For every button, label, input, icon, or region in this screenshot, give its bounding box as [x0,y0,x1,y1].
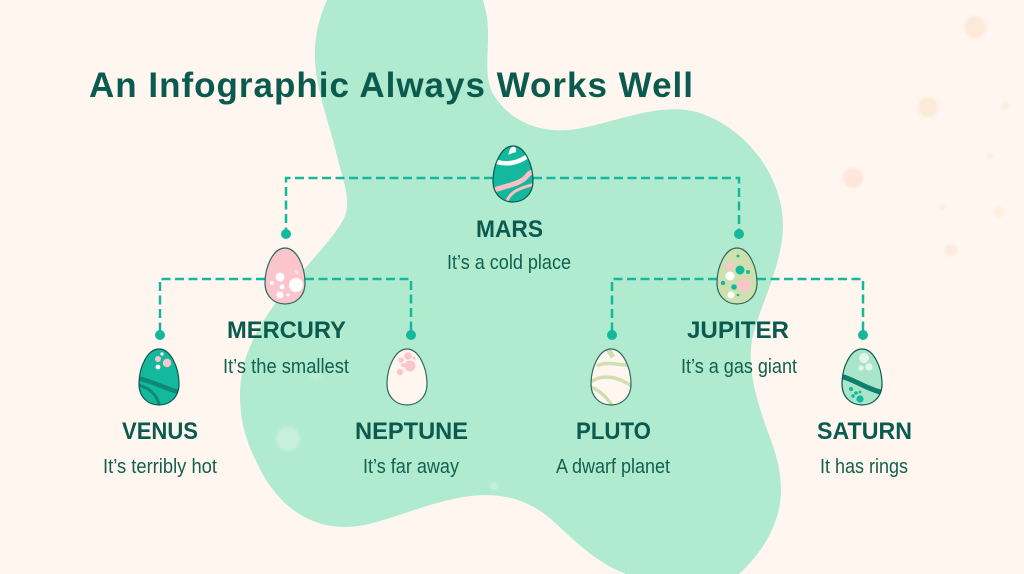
icon: Neptune egg [386,348,428,406]
connector end dots [155,229,868,340]
label: Saturn: SATURN [817,418,912,445]
description: Pluto: A dwarf planet [556,456,670,478]
icon: Mercury egg [264,247,306,305]
icon: Mars egg [491,145,535,204]
description: Saturn: It has rings [820,456,908,478]
label: Jupiter: JUPITER [687,317,789,344]
label: Neptune: NEPTUNE [355,418,468,445]
green blob [240,0,783,574]
node: Pluto [556,348,670,478]
icon: Saturn egg [840,348,884,406]
description: Neptune: It’s far away [363,456,459,478]
connectors [160,178,863,331]
node: Saturn [817,348,912,478]
description: Mercury: It’s the smallest [223,356,349,378]
icon: Pluto egg [590,348,633,407]
node: Jupiter [681,247,797,378]
icon: Jupiter egg [716,247,758,305]
description: Jupiter: It’s a gas giant [681,356,797,378]
icon: Venus egg [137,348,181,407]
node: Mars [447,145,571,274]
node: Mercury [223,247,349,378]
node: Venus [103,348,217,478]
title: An Infographic Always Works Well [89,66,693,105]
description: Venus: It’s terribly hot [103,456,217,478]
label: Pluto: PLUTO [576,418,651,445]
label: Mercury: MERCURY [227,317,346,344]
description: Mars: It’s a cold place [447,252,571,274]
decorative bokeh dots [276,16,1009,490]
label: Venus: VENUS [122,418,198,445]
label: Mars: MARS [476,216,543,243]
node: Neptune [355,348,468,478]
